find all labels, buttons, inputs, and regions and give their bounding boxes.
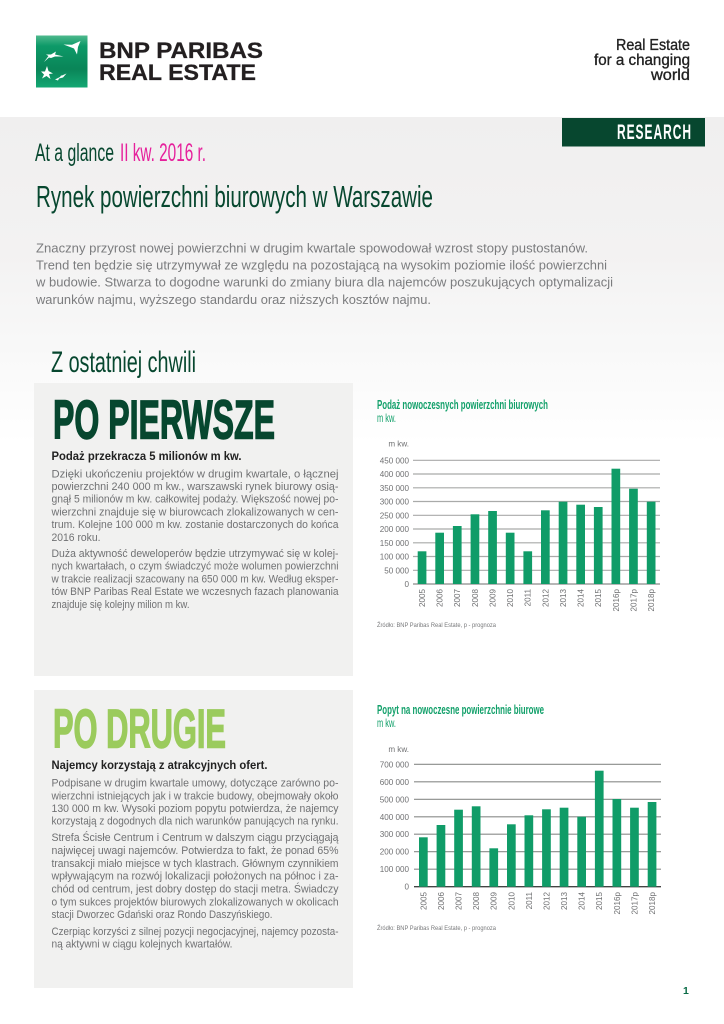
demand x axis labels: 2014 bbox=[578, 892, 587, 910]
demand y axis labels: 500 000 bbox=[380, 795, 409, 804]
chart title: demand: m kw. bbox=[377, 716, 396, 730]
chart title: demand: Popyt na nowoczesne powierzchnie biurowe bbox=[377, 702, 544, 717]
heading: at a glance: At a glance bbox=[35, 139, 114, 167]
chart title: supply bbox=[377, 397, 548, 425]
body text: o tym sukces projektów biurowych zlokalizowanych w okolicach bbox=[52, 896, 339, 908]
demand x axis labels: 2005 bbox=[419, 892, 428, 910]
logo wordmark: BNP PARIBAS bbox=[99, 38, 263, 63]
heading: at a glance: II kw. 2016 r. bbox=[120, 139, 206, 167]
body text: wierzchni istniejących jak i w trakcie budowy, obejmowały około bbox=[51, 790, 339, 802]
page number: 1 bbox=[683, 985, 689, 997]
intro text block: warunków najmu, wyższego standardu oraz niższych kosztów najmu. bbox=[35, 292, 431, 307]
bar chart: demand bbox=[380, 745, 661, 915]
demand x axis labels: 2018p bbox=[648, 892, 657, 915]
body text bbox=[51, 778, 339, 951]
intro text block: w budowie. Stwarza to dogodne warunki do zmiany biura dla najemców poszukujących optymalizacji bbox=[35, 275, 613, 290]
subheading: Podaż przekracza 5 milionów m kw. bbox=[52, 450, 242, 463]
supply y axis labels: 300 000 bbox=[380, 498, 409, 506]
body text: wpływającym na rozwój lokalizacji położonych na północ i za- bbox=[51, 871, 339, 883]
intro text block: Znaczny przyrost nowej powierzchni w drugim kwartale spowodował wzrost stopy pustostanów. bbox=[36, 241, 588, 256]
demand y axis labels: 700 000 bbox=[380, 760, 409, 769]
logo: BNP Paribas Real Estate bbox=[36, 36, 263, 88]
research badge bbox=[562, 118, 705, 146]
supply x axis labels: 2012 bbox=[541, 589, 550, 607]
demand x axis labels: 2010 bbox=[507, 892, 516, 910]
tagline: for a changing bbox=[594, 52, 690, 69]
supply x axis labels: 2014 bbox=[577, 589, 586, 607]
supply x axis labels: 2018p bbox=[647, 589, 656, 612]
body text: ną aktywni w ciągu kolejnych kwartałów. bbox=[52, 939, 232, 951]
demand x axis labels: 2007 bbox=[454, 892, 464, 910]
body text: 130 000 m kw. Wysoki poziom popytu potwierdza, że najemcy bbox=[52, 803, 339, 815]
panel: po pierwsze bbox=[34, 383, 353, 676]
supply y axis labels: m kw. bbox=[388, 440, 409, 449]
body text: stacji Dworzec Gdański oraz Rondo Daszyńskiego. bbox=[52, 909, 272, 921]
supply x axis labels: 2011 bbox=[524, 589, 533, 606]
demand y axis labels: 300 000 bbox=[380, 830, 409, 839]
demand y axis labels: 100 000 bbox=[380, 865, 409, 874]
demand y axis labels bbox=[380, 745, 409, 892]
supply x axis labels: 2015 bbox=[594, 589, 603, 607]
demand bars bbox=[419, 771, 656, 887]
demand x axis labels: 2015 bbox=[595, 892, 604, 910]
body text bbox=[50, 468, 339, 611]
logo wordmark bbox=[99, 38, 263, 85]
supply y axis labels: 100 000 bbox=[380, 552, 409, 562]
supply x axis labels: 2013 bbox=[559, 589, 568, 607]
body text: trum. Kolejne 100 000 m kw. zostanie dostarczonych do końca bbox=[52, 519, 339, 531]
body text: Czerpiąc korzyści z silnej pozycji negocjacyjnej, najemcy pozosta- bbox=[52, 926, 339, 938]
tagline: world bbox=[650, 67, 690, 84]
chart title: supply: m kw. bbox=[377, 411, 396, 425]
supply y axis labels: 250 000 bbox=[380, 511, 409, 520]
supply x axis labels: 2007 bbox=[453, 589, 462, 607]
tagline bbox=[594, 37, 690, 84]
supply y axis labels: 450 000 bbox=[380, 456, 409, 465]
supply y axis labels: 200 000 bbox=[380, 525, 409, 534]
source note: supply: Źródło: BNP Paribas Real Estate, p - prognoza bbox=[377, 622, 497, 629]
chart title: demand bbox=[377, 702, 544, 730]
body text: najwięcej uwagi najemców. Potwierdza to fakt, że ponad 65% bbox=[52, 845, 339, 857]
body text: transakcji miało miejsce w tych klastrach. Głównym czynnikiem bbox=[52, 858, 339, 870]
supply bars bbox=[418, 469, 656, 584]
supply x axis labels: 2008 bbox=[471, 589, 480, 607]
demand x axis labels: 2006 bbox=[437, 892, 446, 910]
body text: 2016 roku. bbox=[52, 532, 100, 544]
subheading: Najemcy korzystają z atrakcyjnych ofert. bbox=[52, 759, 268, 772]
supply x axis labels: 2005 bbox=[418, 589, 427, 607]
supply y axis labels: 0 bbox=[404, 580, 409, 589]
research badge: RESEARCH bbox=[617, 121, 691, 144]
body text: Strefa Ścisłe Centrum i Centrum w dalszym ciągu przyciągają bbox=[52, 831, 339, 844]
supply y axis labels: 350 000 bbox=[380, 484, 409, 493]
demand y axis labels: m kw. bbox=[388, 745, 409, 754]
tagline: Real Estate bbox=[616, 37, 690, 54]
supply x axis labels: 2017p bbox=[629, 589, 638, 612]
demand x axis labels: 2017p bbox=[630, 892, 639, 915]
body text: chód od centrum, jest dobry dostęp do stacji metra. Świadczy bbox=[52, 882, 339, 896]
demand y axis labels: 0 bbox=[404, 883, 409, 892]
body text: Duża aktywność deweloperów będzie utrzymywać się w kolej- bbox=[52, 548, 339, 560]
chart title: supply: Podaż nowoczesnych powierzchni biurowych bbox=[377, 397, 548, 412]
section heading: Z ostatniej chwili bbox=[51, 346, 196, 379]
body text: gnął 5 milionów m kw. całkowitej podaży. Większość nowej po- bbox=[52, 494, 339, 506]
demand x axis labels: 2013 bbox=[560, 892, 569, 910]
demand x axis labels bbox=[419, 892, 657, 915]
supply x axis labels bbox=[418, 589, 656, 612]
source note: demand: Źródło: BNP Paribas Real Estate, p - prognoza bbox=[377, 925, 497, 932]
body text: powierzchni 240 000 m kw., warszawski rynek biurowy osią- bbox=[52, 481, 339, 493]
title: Rynek powierzchni biurowych w Warszawie bbox=[36, 179, 433, 214]
demand y axis labels: 600 000 bbox=[380, 778, 409, 787]
supply y axis labels: 400 000 bbox=[380, 470, 409, 479]
big heading: PO PIERWSZE: PO PIERWSZE bbox=[53, 388, 275, 450]
supply x axis labels: 2009 bbox=[488, 589, 498, 607]
supply x axis labels: 2010 bbox=[506, 589, 515, 607]
logo wordmark: REAL ESTATE bbox=[99, 60, 256, 85]
big heading: PO DRUGIE: PO DRUGIE bbox=[53, 697, 226, 759]
body text: wierzchni znajduje się w biurowcach zlokalizowanych w cen- bbox=[50, 506, 339, 518]
demand y axis labels: 400 000 bbox=[380, 813, 409, 822]
intro text block bbox=[35, 241, 613, 307]
demand y axis labels: 200 000 bbox=[380, 848, 409, 857]
icon: green square with stars bbox=[36, 36, 88, 88]
supply x axis labels: 2016p bbox=[612, 589, 621, 612]
supply y axis labels: 50 000 bbox=[384, 566, 409, 575]
panel: po drugie bbox=[34, 690, 353, 988]
supply y axis labels bbox=[380, 440, 409, 589]
body text: nych kwartałach, o czym świadczyć może wolumen powierzchni bbox=[52, 561, 338, 573]
demand x axis labels: 2009 bbox=[490, 892, 499, 910]
body text: w trakcie realizacji szacowany na 650 000 m kw. Według eksper- bbox=[51, 573, 339, 585]
body text: Dzięki ukończeniu projektów w drugim kwartale, o łącznej bbox=[52, 468, 338, 480]
bar chart: supply bbox=[380, 440, 660, 612]
body text: tów BNP Paribas Real Estate we wczesnych fazach planowania bbox=[52, 586, 339, 598]
demand x axis labels: 2016p bbox=[613, 892, 622, 915]
body text: korzystają z dogodnych dla nich warunków panujących na rynku. bbox=[52, 816, 338, 828]
demand x axis labels: 2008 bbox=[472, 892, 481, 910]
demand x axis labels: 2011 bbox=[525, 892, 534, 909]
supply y axis labels: 150 000 bbox=[380, 539, 409, 548]
demand x axis labels: 2012 bbox=[542, 892, 551, 910]
body text: znajduje się kolejny milion m kw. bbox=[52, 599, 190, 611]
supply x axis labels: 2006 bbox=[436, 589, 445, 607]
intro text block: Trend ten będzie się utrzymywał ze względu na pozostającą na wysokim poziomie ilość powierzchni bbox=[36, 258, 607, 273]
body text: Podpisane w drugim kwartale umowy, dotyczące zarówno po- bbox=[52, 778, 339, 790]
